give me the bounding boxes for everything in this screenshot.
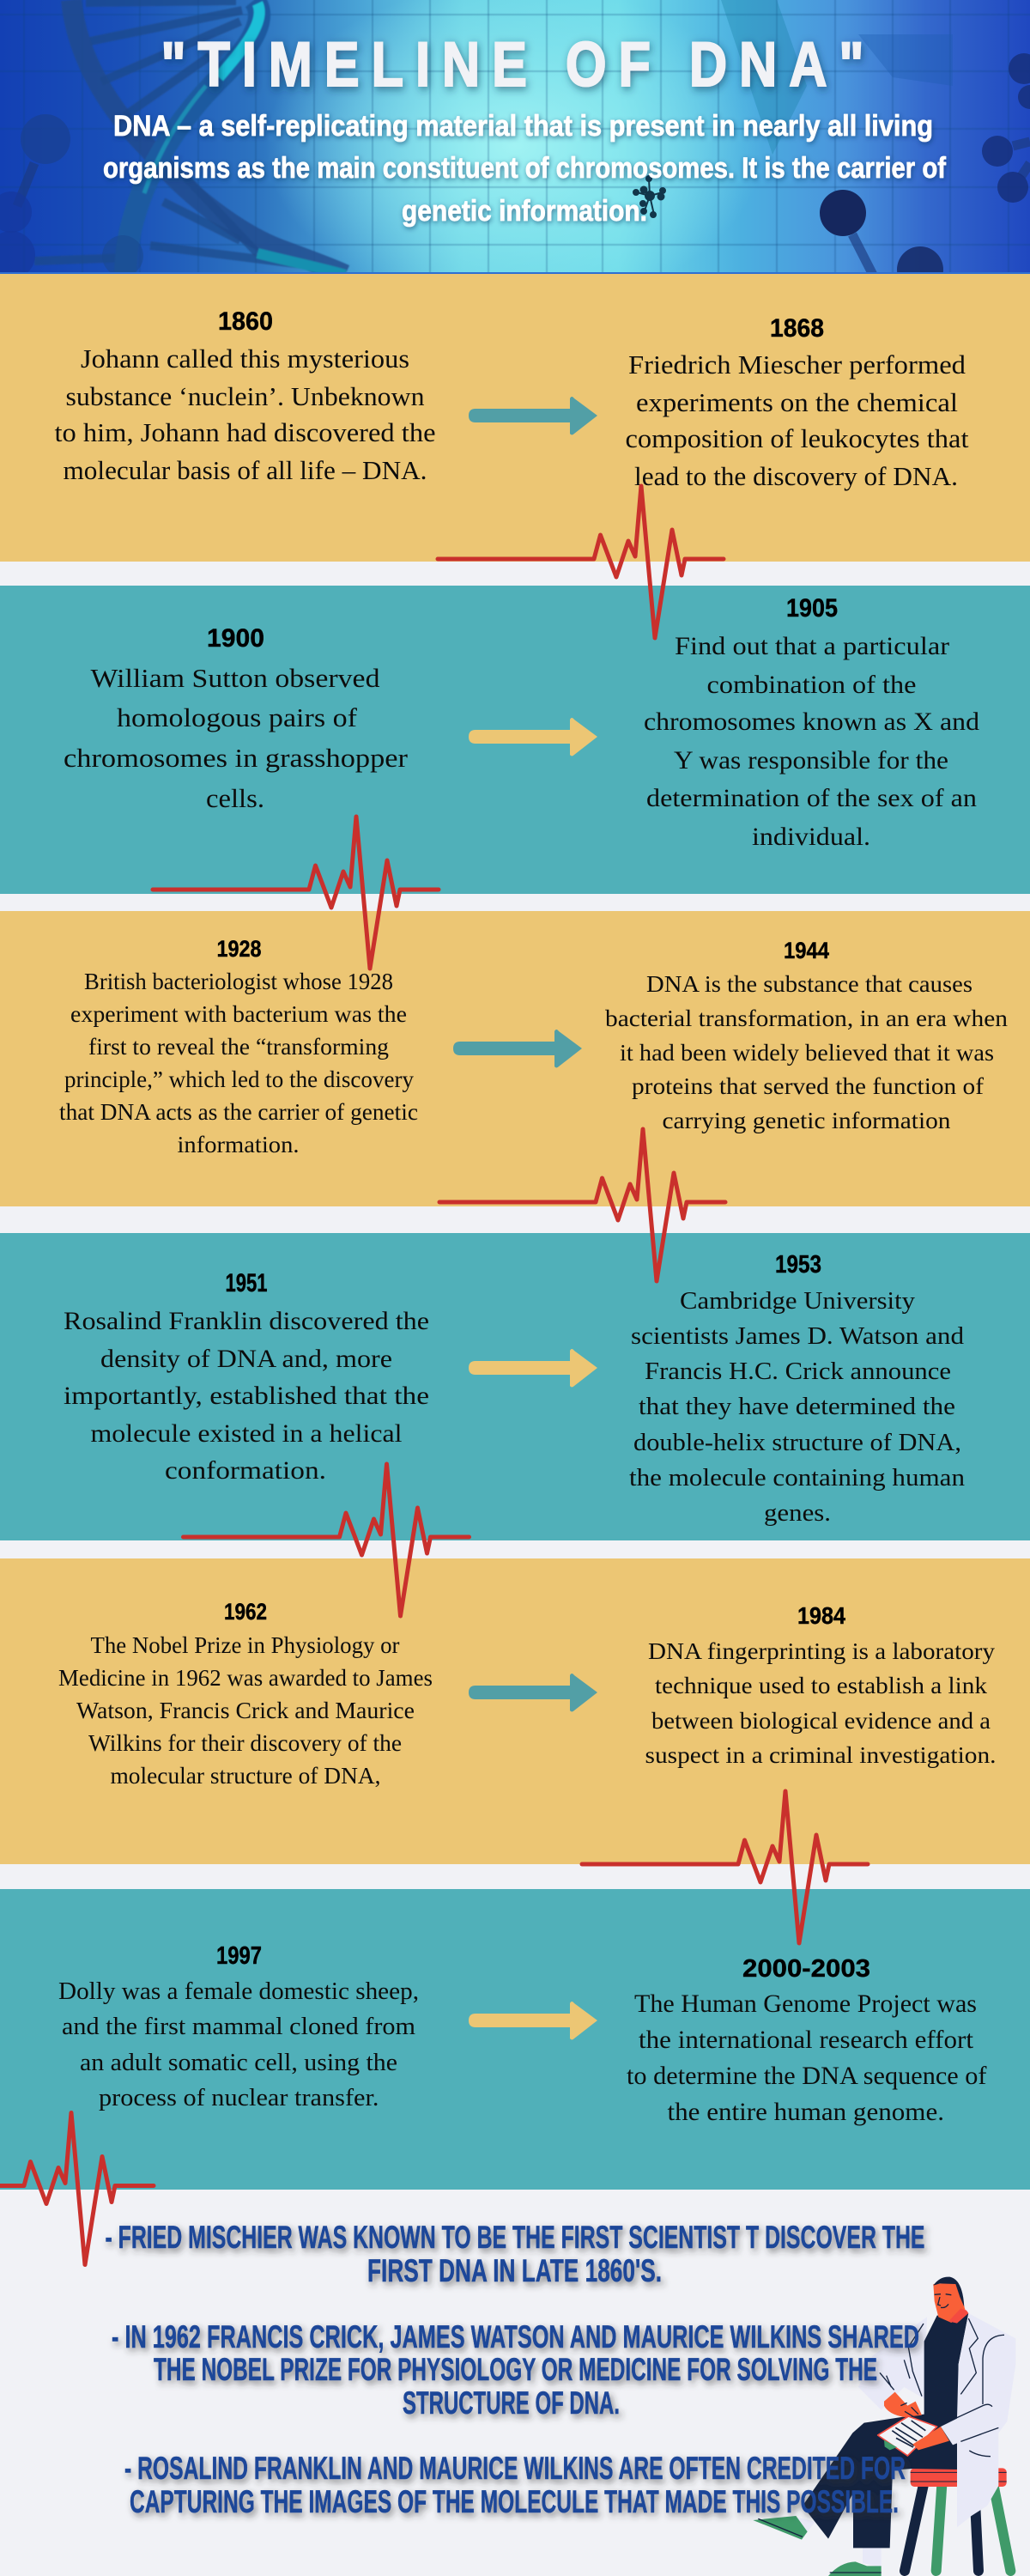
text: 1953 event: double-helix structure of DNA, (633, 1429, 961, 1456)
panel: 1951 and 1953 (0, 1233, 1030, 1540)
text: 1944 event: bacterial transformation, in an era when (605, 1005, 1008, 1031)
text: 1900 event: homologous pairs of (117, 703, 358, 732)
text: 1868 event: experiments on the chemical (636, 388, 958, 417)
text: 1900 event: cells. (206, 784, 264, 813)
heartbeat line 1 (438, 486, 724, 638)
text: 1962 event (58, 1632, 433, 1789)
text: 1951 event: molecule existed in a helical (91, 1419, 402, 1448)
text block: closing facts (105, 2220, 925, 2519)
text: 1868 event: lead to the discovery of DNA. (634, 462, 958, 491)
icon: scientist on stool (753, 2277, 1015, 2576)
text: 1928 event: information. (177, 1132, 299, 1157)
text: 1860 event (55, 344, 436, 485)
text: 1997 event: Dolly was a female domestic sheep, (58, 1978, 419, 2005)
head (933, 2282, 966, 2323)
text: 1905 event: chromosomes known as X and (644, 708, 979, 736)
heartbeat line 3 (439, 1129, 725, 1281)
year 2000-2003: 2000-2003 (742, 1955, 870, 1983)
text: 1928 event: that DNA acts as the carrier of genetic (59, 1099, 418, 1125)
text: 1905 event: determination of the sex of an (646, 785, 977, 812)
arrow: 1951 to 1953 (469, 1349, 597, 1388)
text: 1860 event: substance ‘nuclein’. Unbeknown (65, 382, 424, 411)
text: 1951 event: importantly, established that the (64, 1382, 429, 1410)
text block: DNA definition: genetic information. (402, 195, 647, 228)
text: 1944 event (605, 970, 1008, 1133)
text: 1984 event: technique used to establish a link (655, 1672, 987, 1698)
text: 1944 event: it had been widely believed that it was (620, 1039, 994, 1066)
fact: Miescher (105, 2220, 925, 2288)
arrow: 1900 to 1905 (469, 718, 597, 756)
other hand (912, 2427, 949, 2450)
text: 2000-2003 event: the international research effort (639, 2026, 974, 2054)
text: 1928 event: experiment with bacterium was the (70, 1001, 407, 1027)
text: 1928 event: principle,” which led to the discovery (64, 1066, 414, 1092)
text: 1944 event: proteins that served the function of (632, 1072, 985, 1099)
fact: Nobel prize (112, 2319, 919, 2421)
text block: DNA definition: DNA – a self-replicating material that is present in nearly all living (113, 110, 933, 143)
text: 1905 event: Find out that a particular (675, 633, 949, 660)
clipboard (878, 2416, 937, 2456)
text: 1900 event (64, 664, 408, 813)
year 1928: 1928 (216, 936, 261, 962)
panel: header banner (0, 0, 1030, 274)
icon: molecule balls (0, 53, 1030, 293)
stool legs (905, 2484, 1010, 2571)
text: 1905 event: Y was responsible for the (674, 747, 948, 775)
text: 2000-2003 event: the entire human genome. (668, 2099, 944, 2126)
text: 1951 event: density of DNA and, more (100, 1345, 392, 1373)
text: 1953 event: Francis H.C. Crick announce (645, 1358, 951, 1385)
text: 1984 event: suspect in a criminal investigation. (645, 1741, 996, 1768)
text: 1997 event: process of nuclear transfer. (99, 2085, 379, 2111)
text: 1997 event: an adult somatic cell, using the (80, 2050, 397, 2076)
text: 1953 event: genes. (764, 1499, 831, 1527)
coat left side (858, 2317, 927, 2410)
text: 1905 event: combination of the (707, 671, 917, 699)
text: 1953 event: the molecule containing human (629, 1464, 966, 1492)
text: 1962 event: Watson, Francis Crick and Maurice (76, 1698, 415, 1723)
icon: DNA helix (34, 0, 345, 276)
year 1984: 1984 (797, 1602, 845, 1629)
text: 1953 event (629, 1287, 966, 1527)
face (935, 2294, 951, 2307)
hand on clipboard (884, 2392, 922, 2417)
fact: Nobel prize: STRUCTURE OF DNA. (403, 2385, 620, 2421)
text: 1951 event: conformation. (165, 1456, 326, 1485)
panel: 1900 and 1905 (0, 586, 1030, 894)
text: 1900 event: William Sutton observed (91, 664, 379, 693)
stool seat (911, 2468, 1007, 2487)
text: 1944 event: DNA is the substance that causes (646, 970, 972, 997)
year 1951: 1951 (225, 1269, 268, 1297)
text: 1984 event: between biological evidence and a (651, 1707, 991, 1734)
trousers (803, 2415, 959, 2548)
fact: Franklin (124, 2451, 906, 2519)
title: "TIMELINE OF DNA" (161, 30, 864, 100)
coat sleeve and details (941, 2406, 1007, 2445)
year 1962: 1962 (224, 1599, 267, 1625)
text: 1944 event: carrying genetic information (663, 1107, 951, 1133)
socks and shoes (753, 2516, 882, 2576)
text: 1868 event: Friedrich Miescher performed (628, 350, 966, 380)
heartbeat line 2 (153, 817, 439, 969)
text: 1984 event: DNA fingerprinting is a laboratory (648, 1637, 995, 1664)
text: 1962 event: Medicine in 1962 was awarded to James (58, 1665, 433, 1691)
arrow: 1997 to 2000-2003 (469, 2002, 597, 2040)
text: 1928 event (59, 969, 418, 1157)
text: 1868 event (625, 350, 969, 491)
year 1868: 1868 (770, 314, 824, 343)
text: 1951 event: Rosalind Franklin discovered the (64, 1307, 429, 1335)
arrow: 1860 to 1868 (469, 397, 597, 434)
panel: 1928 and 1944 (0, 911, 1030, 1206)
heartbeat line 6 (0, 2112, 154, 2265)
text: 1905 event (644, 633, 979, 851)
text: 1962 event: Wilkins for their discovery of the (88, 1730, 402, 1756)
panel: 1860 and 1868 (0, 274, 1030, 562)
text: 1984 event (645, 1637, 996, 1768)
icon: small molecule (633, 176, 665, 217)
text: 1953 event: that they have determined the (639, 1393, 955, 1420)
text: 1928 event: first to reveal the “transforming (88, 1034, 389, 1060)
text block: DNA definition (103, 110, 947, 228)
text: 1860 event: to him, Johann had discovered the (55, 418, 436, 447)
year 1953: 1953 (775, 1251, 821, 1279)
panel: 1997 and 2000-2003 (0, 1889, 1030, 2190)
text: 1868 event: composition of leukocytes that (625, 424, 969, 453)
text: 1900 event: chromosomes in grasshopper (64, 744, 408, 773)
heartbeat line 4 (184, 1464, 469, 1616)
heartbeat line 5 (582, 1791, 868, 1943)
text: 2000-2003 event: to determine the DNA sequence of (627, 2063, 987, 2090)
coat lines (880, 2318, 1004, 2457)
text: 1997 event: and the first mammal cloned from (62, 2014, 415, 2040)
year 1900: 1900 (207, 624, 264, 653)
year 1905: 1905 (786, 594, 838, 623)
text: 1962 event: The Nobel Prize in Physiology or (91, 1632, 400, 1658)
text: 2000-2003 event: The Human Genome Project was (634, 1990, 977, 2018)
text: 1928 event: British bacteriologist whose 1928 (84, 969, 393, 994)
text: 1953 event: scientists James D. Watson and (631, 1322, 965, 1350)
shirt (924, 2313, 968, 2427)
text: 1997 event (58, 1978, 419, 2111)
panel: 1962 and 1984 (0, 1558, 1030, 1864)
arrow: 1962 to 1984 (469, 1674, 597, 1712)
coat front (957, 2313, 1015, 2527)
text: 1953 event: Cambridge University (680, 1287, 916, 1315)
text: 1962 event: molecular structure of DNA, (110, 1763, 381, 1789)
text: 1951 event (64, 1307, 429, 1485)
text: 1860 event: Johann called this mysterious (81, 344, 409, 374)
year 1944: 1944 (784, 938, 829, 963)
text: 1905 event: individual. (752, 823, 870, 851)
year 1997: 1997 (216, 1942, 262, 1970)
arrow: 1928 to 1944 (453, 1030, 582, 1068)
fact: Miescher: FIRST DNA IN LATE 1860'S. (367, 2253, 662, 2288)
text: 1860 event: molecular basis of all life – DNA. (64, 456, 427, 485)
year 1860: 1860 (218, 307, 273, 336)
text: 2000-2003 event (627, 1990, 987, 2126)
